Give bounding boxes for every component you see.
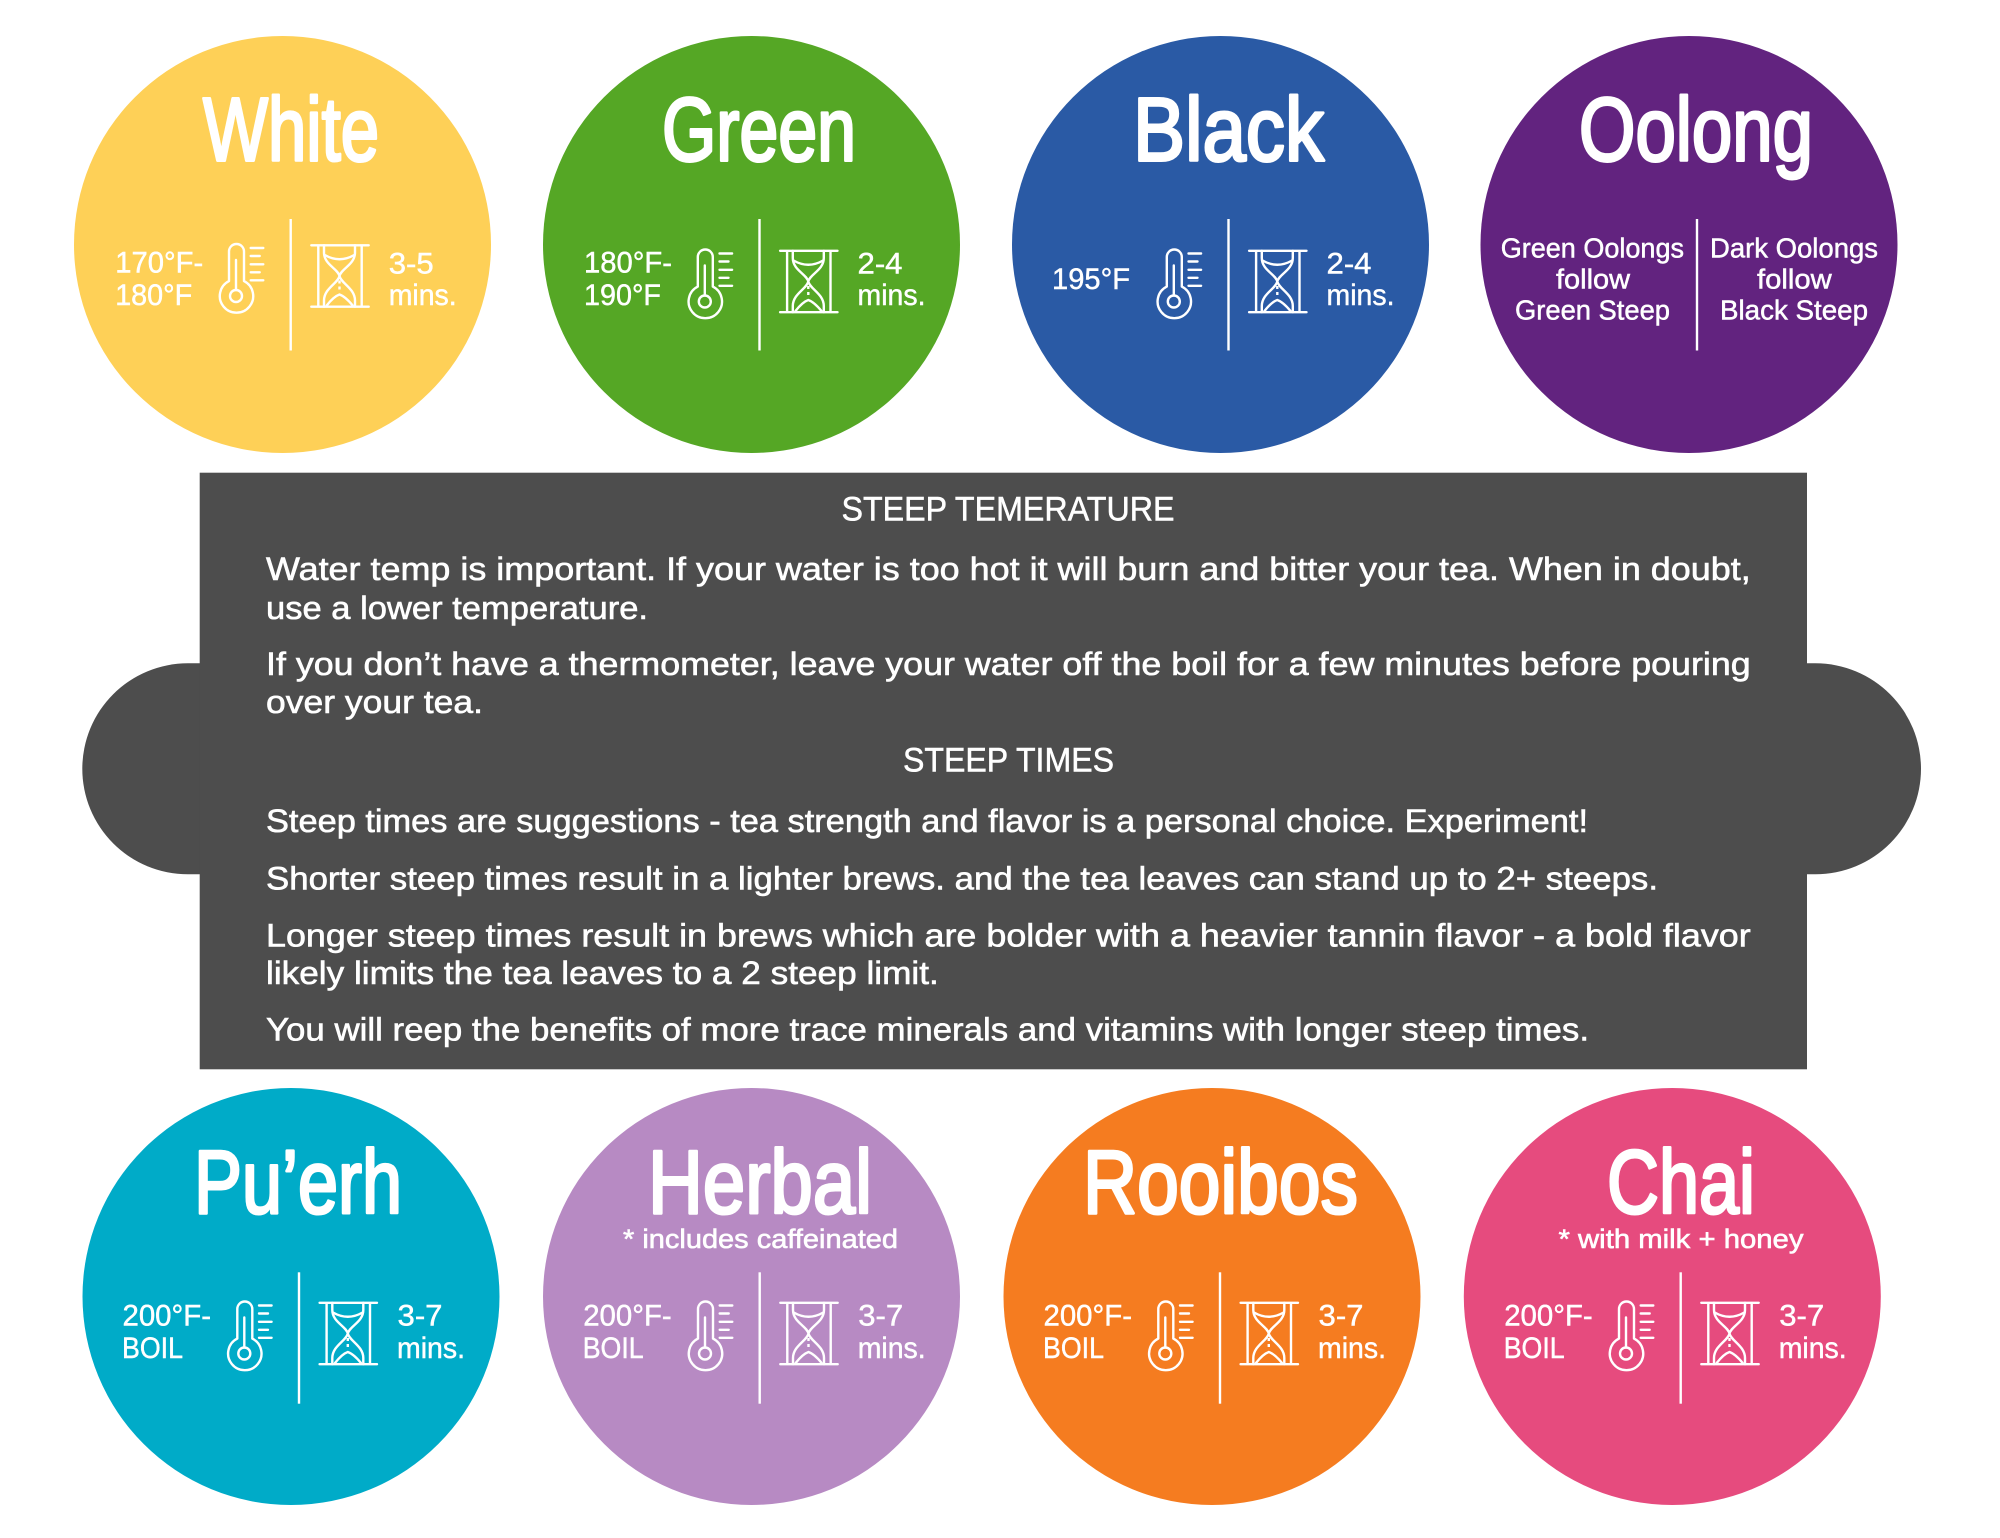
text: benefits: You will reep the benefits of more trace minerals and vitamins with longer steep times. xyxy=(266,1012,1589,1048)
heading: steep temperature: STEEP TEMERATURE xyxy=(842,491,1174,529)
stats: white: mins. xyxy=(389,279,457,312)
stats: herbal: 200°F- xyxy=(583,1300,672,1333)
stats: green: 180°F- xyxy=(584,246,672,280)
text: water temp line 2: use a lower temperature. xyxy=(266,590,648,626)
stats: herbal xyxy=(583,1272,926,1404)
stats: herbal: BOIL xyxy=(583,1332,644,1365)
stats: pu'erh: 200°F- xyxy=(122,1300,211,1333)
stats: black: 2-4 xyxy=(1326,247,1372,280)
title: herbal: Herbal xyxy=(648,1133,872,1233)
stats: green: mins. xyxy=(858,279,926,312)
panel: white tea xyxy=(74,36,491,453)
title: oolong: Oolong xyxy=(1579,80,1813,180)
panel background with side lobes xyxy=(82,473,1921,1069)
stats: chai: mins. xyxy=(1779,1332,1847,1365)
stats: rooibos: mins. xyxy=(1318,1332,1386,1365)
heading: steep times: STEEP TIMES xyxy=(903,742,1114,780)
title: rooibos: Rooibos xyxy=(1083,1133,1358,1233)
stats: white: 180°F xyxy=(115,279,192,312)
panel: oolong tea xyxy=(1480,36,1898,453)
text: green oolongs: follow xyxy=(1556,264,1631,294)
stats: green: 190°F xyxy=(584,279,661,312)
panel: herbal tea xyxy=(543,1088,960,1505)
stats: white: 3-5 xyxy=(389,247,434,280)
text: green oolongs: Green Steep xyxy=(1515,294,1670,325)
text: dark oolongs: Black Steep xyxy=(1720,294,1868,325)
text: dark oolongs: Dark Oolongs xyxy=(1710,232,1878,263)
stats: chai: BOIL xyxy=(1504,1332,1565,1365)
text: longer steep: Longer steep times result in brews which are bolder with a heavier tannin flavor - a bold flavor xyxy=(266,918,1751,954)
stats: pu'erh: BOIL xyxy=(122,1332,183,1365)
text: green oolongs: Green Oolongs xyxy=(1501,232,1684,263)
panel: black tea xyxy=(1012,36,1429,453)
panel: chai tea xyxy=(1464,1088,1881,1505)
note: with milk and honey: * with milk + honey xyxy=(1558,1224,1804,1254)
stats: white: 170°F- xyxy=(115,246,203,280)
stats: green: 2-4 xyxy=(858,247,902,280)
panel: steeping notes xyxy=(82,473,1921,1069)
stats: chai xyxy=(1504,1272,1847,1404)
stats: rooibos: BOIL xyxy=(1043,1332,1104,1365)
title: pu'erh: Pu’erh xyxy=(194,1133,402,1233)
text: longer steep line 2: likely limits the tea leaves to a 2 steep limit. xyxy=(266,955,939,991)
text: no thermometer line 2: over your tea. xyxy=(266,684,483,720)
text: suggestions: Steep times are suggestions - tea strength and flavor is a personal choice. Experiment! xyxy=(266,803,1588,839)
stats: pu'erh xyxy=(122,1272,465,1404)
text: green oolongs xyxy=(1501,232,1684,325)
divider: oolong xyxy=(1696,219,1698,350)
title: white: White xyxy=(203,80,379,180)
text: dark oolongs: follow xyxy=(1757,264,1833,294)
stats: black xyxy=(1052,219,1394,350)
stats: rooibos: 3-7 xyxy=(1318,1300,1364,1333)
stats: chai: 3-7 xyxy=(1779,1300,1824,1333)
title: chai: Chai xyxy=(1607,1133,1755,1233)
note: includes caffeinated: * includes caffeinated xyxy=(623,1224,898,1254)
stats: black: 195°F xyxy=(1052,263,1130,296)
stats: pu'erh: 3-7 xyxy=(398,1300,442,1333)
text: no thermometer: If you don’t have a thermometer, leave your water off the boil for a few minutes before pouring xyxy=(266,646,1751,682)
stats: pu'erh: mins. xyxy=(397,1332,465,1365)
stats: rooibos: 200°F- xyxy=(1044,1300,1132,1333)
panel: green tea xyxy=(543,36,960,453)
text: dark oolongs xyxy=(1710,232,1878,325)
stats: herbal: 3-7 xyxy=(858,1300,903,1333)
text: water temp: Water temp is important. If your water is too hot it will burn and bitter your tea. When in doubt, xyxy=(266,551,1751,587)
panel: rooibos tea xyxy=(1004,1088,1420,1505)
title: green: Green xyxy=(662,80,856,180)
stats: green xyxy=(584,219,926,350)
stats: rooibos xyxy=(1043,1272,1386,1404)
stats: chai: 200°F- xyxy=(1504,1300,1593,1333)
stats: white xyxy=(115,219,457,350)
text: shorter steep: Shorter steep times result in a lighter brews. and the tea leaves can stand up to 2+ steeps. xyxy=(266,860,1658,896)
stats: herbal: mins. xyxy=(858,1332,926,1365)
panel: pu'erh tea xyxy=(82,1088,500,1505)
title: black: Black xyxy=(1133,80,1325,180)
stats: black: mins. xyxy=(1326,279,1394,312)
